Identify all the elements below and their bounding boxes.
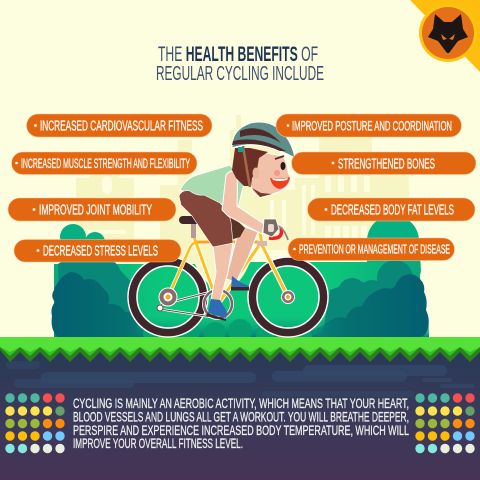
- chain: [160, 290, 218, 318]
- shirt: [180, 165, 244, 208]
- frame: [168, 232, 288, 304]
- pill: stress levels: [14, 240, 181, 262]
- handlebar: [269, 228, 282, 238]
- right dot grid: [415, 393, 475, 453]
- title: REGULAR CYCLING INCLUDE: [156, 63, 324, 85]
- rear wheel: [128, 257, 208, 337]
- face: [248, 150, 291, 198]
- hubs: [159, 288, 177, 306]
- hair: [232, 148, 268, 186]
- body paragraph: IMPROVE YOUR OVERALL FITNESS LEVEL.: [73, 435, 243, 451]
- bushes: [51, 215, 429, 344]
- title: THE HEALTH BENEFITS OF: [158, 43, 318, 66]
- pill: muscle strength: INCREASED MUSCLE STRENGTH AND FLEXIBILITY: [21, 156, 190, 171]
- pill: body fat: [308, 198, 475, 221]
- ear: [252, 168, 260, 178]
- eye: [280, 162, 286, 170]
- pill: stress levels: DECREASED STRESS LEVELS: [43, 244, 158, 260]
- shorts back: [228, 212, 245, 240]
- near leg: [211, 243, 233, 301]
- pill: cardiovascular fitness: INCREASED CARDIOVASCULAR FITNESS: [40, 118, 203, 134]
- mouth: [270, 177, 290, 189]
- left dot grid: [5, 393, 65, 453]
- arm: [222, 171, 264, 234]
- chainring: [204, 290, 232, 318]
- near shoe: [208, 299, 227, 318]
- helmet: [232, 122, 295, 158]
- title: [156, 43, 324, 85]
- pill: cardiovascular fitness: [26, 114, 212, 137]
- shorts: [179, 191, 233, 247]
- cyclist: [179, 122, 295, 321]
- benefit pills: [8, 114, 476, 262]
- pill: muscle strength: [12, 152, 197, 174]
- front wheel: [248, 257, 328, 337]
- body paragraph: [73, 395, 409, 451]
- far shoe: [231, 276, 249, 289]
- saddle: [191, 222, 196, 238]
- head: [232, 122, 295, 198]
- pill: joint mobility: IMPROVED JOINT MOBILITY: [39, 202, 152, 218]
- bicycle: [128, 216, 328, 337]
- glove: [263, 219, 279, 237]
- badge: fox logo: [410, 0, 480, 72]
- far leg: [226, 225, 258, 282]
- strap: [243, 146, 250, 187]
- chin shadow: [252, 188, 272, 197]
- pill: bones: [292, 152, 476, 174]
- ground and night panel: [0, 337, 480, 480]
- pill: posture: [276, 114, 462, 137]
- pill: disease: [288, 238, 454, 260]
- pill: joint mobility: [8, 198, 176, 221]
- skyline buildings: [76, 115, 409, 295]
